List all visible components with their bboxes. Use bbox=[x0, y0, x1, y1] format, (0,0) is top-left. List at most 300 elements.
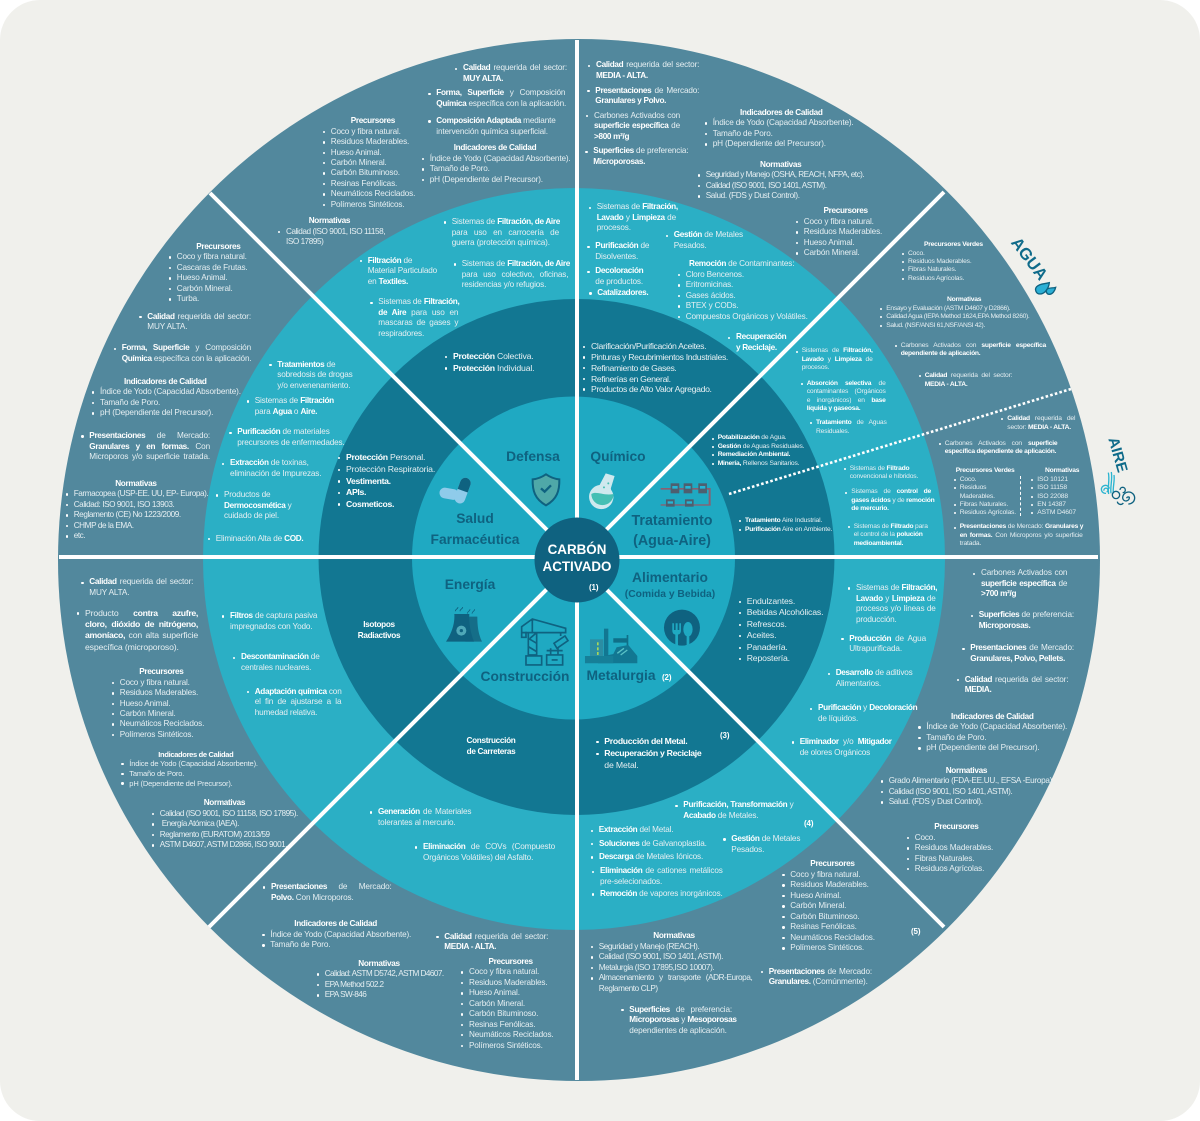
Salud: precursores: Precursores bbox=[196, 242, 240, 251]
sector title: Salud Farmacéutica: Salud bbox=[456, 511, 494, 526]
Salud: dermocosmética: Dermocosmética y bbox=[224, 501, 292, 510]
Agua: calidad bbox=[919, 372, 1012, 388]
Aire: normativas: ASTM D4607 bbox=[1037, 509, 1076, 516]
Metalurgia: normativas: Normativas bbox=[653, 931, 695, 940]
Energía: calidad: MUY ALTA. bbox=[89, 588, 129, 597]
Aire: normativas bbox=[1031, 467, 1080, 516]
Energía: adaptación: el fin de ajustarse a la bbox=[255, 697, 341, 706]
Químico: precursores: Precursores bbox=[823, 206, 868, 215]
Alimentario: indicadores: Índice de Yodo (Capacidad Absorbente). bbox=[926, 722, 1067, 731]
Salud: forma: Forma, Superficie y Composición bbox=[122, 343, 251, 352]
Construcción: precursores: Carbón Mineral. bbox=[469, 999, 525, 1008]
Agua: precursores verdes: Residuos Agrícolas. bbox=[908, 275, 964, 282]
Aire: carbones: específica dependiente de aplicación. bbox=[945, 448, 1056, 455]
Energía: producto: específica (microporoso). bbox=[85, 642, 179, 652]
Agua: precursores verdes: Precursores Verdes bbox=[924, 241, 983, 248]
Agua: normativas: Ensayo y Evaluación (ASTM D4607 y D2866). bbox=[886, 305, 1010, 312]
Salud: normativas: Farmacopea (USP-EE. UU, EP- Europa). bbox=[74, 489, 208, 498]
Alimentario: presentaciones: Granulares, Polvo, Pellets. bbox=[970, 654, 1065, 663]
Energía: precursores: Neumáticos Reciclados. bbox=[120, 719, 204, 728]
Construcción: presentaciones: Presentaciones de Mercado: bbox=[271, 882, 392, 891]
Salud: presentaciones bbox=[89, 431, 210, 463]
Energía: producto: Producto contra azufre, bbox=[85, 608, 198, 618]
Salud: dermocosmética: cuidado de piel. bbox=[224, 511, 279, 520]
Agua: filtración: Sistemas de Filtración, bbox=[802, 347, 873, 354]
Químico: calidad: Calidad requerida del sector: bbox=[596, 60, 699, 69]
Energía: normativas: ASTM D4607, ASTM D2866, ISO 9001. bbox=[160, 840, 287, 849]
Agua: normativas: Normativas bbox=[947, 296, 981, 303]
Defensa: precursores: Resinas Fenólicas. bbox=[331, 179, 397, 188]
Alimentario: normativas: Calidad (ISO 9001, ISO 1401, ASTM). bbox=[889, 787, 1012, 796]
Defensa: textiles: Filtración de bbox=[368, 256, 412, 265]
Construcción: COVs: Orgánicos Volátiles) del Asfalto. bbox=[423, 853, 533, 862]
Salud: presentaciones: Granulares y en formas. Con bbox=[89, 442, 210, 451]
Salud: purificación: precursores de enfermedades. bbox=[237, 438, 345, 447]
Aire: presentaciones: en formas. Con Microporos y/o superficie bbox=[960, 532, 1083, 539]
Defensa: calidad bbox=[455, 63, 567, 83]
Alimentario: aplicaciones: Panadería. bbox=[747, 642, 788, 652]
Defensa: filtración carrocería bbox=[444, 217, 560, 247]
Agua: calidad: MEDIA - ALTA. bbox=[925, 381, 968, 388]
Químico: indicadores bbox=[705, 108, 854, 148]
Químico: decoloración: Decoloración bbox=[595, 266, 643, 275]
Agua: carbones: Carbones Activados con superficie específica bbox=[901, 342, 1046, 349]
Químico: indicadores: Índice de Yodo (Capacidad Absorbente). bbox=[713, 118, 854, 127]
Energía: aplicación: Isotopos bbox=[363, 620, 395, 629]
Metalurgia: purificación: Acabado de Metales. bbox=[683, 811, 758, 820]
Defensa: precursores: Neumáticos Reciclados. bbox=[331, 189, 415, 198]
Químico: disolventes: Disolventes. bbox=[595, 252, 638, 261]
Químico: precursores: Coco y fibra natural. bbox=[804, 217, 874, 226]
Defensa: calidad: Calidad requerida del sector: bbox=[463, 63, 567, 72]
Energía: descontaminación: centrales nucleares. bbox=[241, 663, 311, 672]
Químico: carbones: >800 m²/g bbox=[594, 132, 629, 141]
Químico: disolventes: Purificación de bbox=[595, 241, 649, 250]
Alimentario: indicadores: pH (Dependiente del Precursor). bbox=[926, 743, 1040, 752]
second ring: processes bbox=[203, 188, 945, 930]
heading: Aire: AIRE bbox=[1104, 435, 1131, 474]
Aire: filtrado convencional bbox=[850, 465, 922, 482]
Metalurgia: cationes: pre-selecionados. bbox=[600, 877, 662, 886]
sector title: Químico: Químico bbox=[590, 449, 646, 464]
Energía: precursores: Coco y fibra natural. bbox=[120, 678, 190, 687]
Químico: contaminantes: BTEX y CODs. bbox=[686, 301, 738, 310]
Aire: gases ácidos: Sistemas de control de bbox=[851, 488, 931, 495]
Alimentario: aplicaciones: Endulzantes. bbox=[747, 596, 795, 606]
Alimentario: superficies bbox=[979, 610, 1074, 631]
Aire: precursores verdes: Maderables. bbox=[960, 493, 995, 500]
Químico: contaminantes: Compuestos Orgánicos y Volátiles. bbox=[686, 312, 808, 321]
Aire: precursores verdes: Precursores Verdes bbox=[956, 467, 1015, 474]
Defensa: indicadores bbox=[422, 143, 571, 184]
Metalurgia: aplicaciones: Producción del Metal. bbox=[604, 736, 687, 746]
Construcción: presentaciones: Polvo. Con Microporos. bbox=[271, 893, 354, 902]
Agua: absorción: e inorgánicos) en base bbox=[807, 397, 886, 404]
Energía: precursores: Hueso Animal. bbox=[120, 699, 171, 708]
Químico: superficies: Microporosas. bbox=[593, 157, 645, 166]
Metalurgia: superficies bbox=[629, 1005, 732, 1036]
Energía: producto bbox=[85, 608, 198, 653]
sector title: Tratamiento bbox=[631, 513, 713, 549]
Construcción: materiales: tolerantes al mercurio. bbox=[378, 818, 456, 827]
Energía: normativas: Energía Atómica (IAEA). bbox=[162, 819, 239, 828]
Químico: normativas: Calidad (ISO 9001, ISO 1401, ASTM). bbox=[706, 181, 827, 190]
Alimentario: olores bbox=[800, 737, 892, 758]
Salud: purificación: Purificación de materiales bbox=[237, 427, 330, 436]
Construcción: aplicación: de Carreteras bbox=[467, 747, 515, 756]
Salud: aplicaciones bbox=[346, 452, 434, 510]
Aire: calidad: Calidad requerida del bbox=[1007, 415, 1075, 422]
Alimentario: precursores bbox=[915, 822, 993, 874]
sector title: Salud Farmacéutica bbox=[431, 511, 520, 546]
Construcción: materiales bbox=[378, 807, 471, 828]
Agua: absorción bbox=[801, 380, 886, 412]
Energía: descontaminación: Descontaminación de bbox=[241, 652, 320, 661]
Aire: polución: Sistemas de Filtrado para bbox=[854, 523, 928, 530]
Químico: recuperación: Recuperación bbox=[736, 332, 786, 341]
Alimentario: normativas: Normativas bbox=[946, 766, 987, 775]
Construcción: precursores: Resinas Fenólicas. bbox=[469, 1020, 535, 1029]
Metalurgia: normativas: Seguridad y Manejo (REACH). bbox=[599, 942, 699, 951]
Salud: forma: Química específica con la aplicación. bbox=[122, 354, 252, 363]
Químico: presentaciones: Granulares y Polvo. bbox=[595, 96, 666, 105]
Salud: filtración bbox=[255, 396, 333, 417]
Defensa: forma: Química específica con la aplicación. bbox=[436, 99, 566, 108]
Químico: decoloración: de productos. bbox=[595, 277, 643, 286]
Aire: polución: medioambiental. bbox=[854, 540, 903, 547]
Agua: precursores verdes: Residuos Maderables. bbox=[908, 258, 972, 265]
Químico: aplicaciones bbox=[583, 341, 728, 394]
Aire: polución: el control de la polución bbox=[854, 531, 923, 538]
Energía: adaptación bbox=[255, 687, 341, 718]
Aire: precursores verdes: Fibras Naturales. bbox=[960, 501, 1008, 508]
Energía: normativas bbox=[160, 798, 298, 851]
Metalurgia: normativas: Reglamento CLP) bbox=[599, 984, 658, 993]
Aire: precursores verdes bbox=[954, 467, 1016, 516]
Construcción: indicadores: Indicadores de Calidad bbox=[294, 919, 377, 928]
Agua: precursores verdes: Coco. bbox=[908, 250, 925, 257]
Defensa: precursores: Hueso Animal. bbox=[331, 148, 382, 157]
center label bbox=[542, 542, 611, 574]
Aire: normativas: EN 14387 bbox=[1037, 501, 1066, 508]
Salud: aplicaciones: Cosmeticos. bbox=[346, 499, 394, 509]
Construcción: COVs: Eliminación de COVs (Compuesto bbox=[423, 842, 555, 851]
Construcción: COVs bbox=[423, 842, 555, 863]
Químico: presentaciones: Presentaciones de Mercado: bbox=[595, 86, 699, 95]
sector title: Tratamiento: Tratamiento bbox=[631, 513, 713, 529]
Metalurgia: precursores: Carbón Bituminoso. bbox=[790, 912, 860, 921]
Aire: gases ácidos bbox=[851, 488, 931, 514]
Energía: normativas: Calidad (ISO 9001, ISO 11158, ISO 17895). bbox=[160, 809, 298, 818]
Alimentario: presentaciones bbox=[970, 643, 1074, 664]
Metalurgia: superficies: Microporosas y Mesoporosas bbox=[629, 1015, 737, 1024]
Salud: presentaciones: Microporos y/o superficie tratada. bbox=[89, 452, 210, 461]
Construcción: calidad bbox=[444, 932, 548, 953]
Construcción: normativas: EPA SW-846 bbox=[325, 990, 366, 999]
Construcción: normativas: EPA Method 502.2 bbox=[325, 980, 384, 989]
Alimentario: purificación: de líquidos. bbox=[818, 714, 858, 723]
footnote 4: (4) bbox=[804, 819, 813, 828]
Salud: normativas: Normativas bbox=[115, 479, 157, 488]
Defensa: composición bbox=[428, 116, 556, 136]
Químico: contaminantes: Gases ácidos. bbox=[686, 291, 736, 300]
dashed column separator bbox=[1020, 476, 1021, 516]
Energía: precursores: Carbón Mineral. bbox=[120, 709, 176, 718]
Agua: carbones: dependiente de aplicación. bbox=[901, 350, 980, 357]
Defensa: filtración colectiva bbox=[454, 259, 570, 289]
Salud: COD: Eliminación Alta de COD. bbox=[216, 534, 303, 543]
third ring: applications bbox=[318, 299, 834, 815]
footnote 5: (5) bbox=[911, 927, 920, 936]
Defensa: precursores: Polímeros Sintéticos. bbox=[331, 200, 404, 209]
Metalurgia: metales pesados: Gestión de Metales bbox=[731, 834, 800, 843]
Energía: producto: cloro, dióxido de nitrógeno, bbox=[85, 619, 198, 629]
Salud: normativas: CHMP de la EMA. bbox=[74, 521, 134, 530]
Defensa: protección: Protección Individual. bbox=[453, 363, 534, 373]
Alimentario: superficies: Microporosas. bbox=[979, 621, 1030, 630]
Defensa: normativas: Normativas bbox=[309, 216, 350, 225]
Construcción: materiales: Generación de Materiales bbox=[378, 807, 471, 816]
Construcción: indicadores: Índice de Yodo (Capacidad Absorbente). bbox=[270, 930, 411, 939]
Metalurgia: vapores: Remoción de vapores inorgánicos. bbox=[600, 889, 723, 898]
Aire: aplicaciones bbox=[745, 517, 831, 534]
Alimentario: indicadores bbox=[926, 712, 1066, 754]
Químico: indicadores: pH (Dependiente del Precursor). bbox=[713, 139, 826, 148]
Alimentario: aplicaciones: Aceites. bbox=[747, 630, 776, 640]
Defensa: precursores bbox=[323, 116, 415, 209]
Construcción: indicadores: Tamaño de Poro. bbox=[270, 940, 330, 949]
Defensa: filtración colectiva: residencias y/o refugios. bbox=[462, 280, 546, 289]
Aire: precursores verdes: Coco. bbox=[960, 476, 976, 483]
Agua: absorción: Absorción selectiva de bbox=[807, 380, 886, 387]
icon: cutlery bbox=[664, 610, 700, 646]
Químico: superficies bbox=[585, 146, 688, 166]
Químico: carbones: Carbones Activados con bbox=[594, 111, 680, 120]
Alimentario: aplicaciones: Repostería. bbox=[747, 653, 790, 663]
Energía: aplicación bbox=[344, 619, 414, 641]
sector title: Tratamiento: (Agua-Aire) bbox=[633, 533, 711, 549]
Químico: contaminantes: Remoción de Contaminantes: bbox=[689, 259, 794, 268]
Alimentario: calidad bbox=[965, 675, 1068, 696]
Químico: superficies: Superficies de preferencia: bbox=[593, 146, 688, 155]
Energía: filtros bbox=[230, 611, 317, 632]
Metalurgia: cationes: Eliminación de cationes metálicos bbox=[600, 866, 723, 875]
Defensa: máscaras bbox=[370, 297, 460, 338]
heading: Agua: AGUA bbox=[1007, 234, 1051, 284]
Químico: recuperación: y Reciclaje. bbox=[736, 343, 777, 352]
Salud: calidad: Calidad requerida del sector: bbox=[147, 312, 251, 321]
Construcción: aplicación: Construcción bbox=[467, 736, 515, 745]
Salud: tratamientos: Tratamientos de bbox=[277, 360, 335, 369]
Construcción: precursores: Carbón Bituminoso. bbox=[469, 1009, 538, 1018]
Alimentario: agua bbox=[849, 634, 926, 655]
Metalurgia: precursores: Resinas Fenólicas. bbox=[790, 922, 857, 931]
Químico: precursores: Residuos Maderables. bbox=[804, 227, 882, 236]
Construcción: indicadores bbox=[270, 919, 410, 951]
Metalurgia: precursores: Precursores bbox=[810, 859, 855, 868]
Agua: aplicaciones: Minería, Rellenos Sanitarios. bbox=[718, 460, 799, 467]
Aire: carbones bbox=[939, 440, 1058, 455]
Metalurgia: descarga: Descarga de Metales Iónicos. bbox=[599, 852, 703, 861]
Metalurgia: precursores: Coco y fibra natural. bbox=[790, 870, 860, 879]
Alimentario: olores: Eliminador y/o Mitigador bbox=[800, 737, 892, 746]
Agua: calidad: Calidad requerida del sector: bbox=[925, 372, 1012, 379]
Aire: filtrado convencional: Sistemas de Filtrado bbox=[850, 465, 909, 472]
Salud: precursores: Carbón Mineral. bbox=[177, 284, 233, 293]
Químico: metales pesados: Gestión de Metales bbox=[674, 230, 743, 239]
Energía: normativas: Normativas bbox=[204, 798, 245, 807]
Aire: normativas: ISO 10121 bbox=[1037, 476, 1068, 483]
Defensa: protección: Protección Colectiva. bbox=[453, 351, 534, 361]
Metalurgia: aplicaciones bbox=[604, 736, 704, 771]
Metalurgia: purificación bbox=[683, 800, 794, 821]
Aire: filtrado convencional: convencional e híbridos. bbox=[850, 473, 918, 480]
Metalurgia: aplicaciones: Recuperación y Reciclaje bbox=[604, 748, 701, 758]
Químico: precursores bbox=[796, 206, 882, 257]
icon: nuclear plant bbox=[446, 607, 482, 642]
Salud: indicadores: pH (Dependiente del Precursor). bbox=[100, 408, 213, 417]
Químico: aplicaciones: Pinturas y Recubrimientos Industriales. bbox=[591, 352, 728, 362]
Químico: presentaciones bbox=[587, 86, 699, 105]
Agua: filtración bbox=[796, 347, 873, 371]
Defensa: composición: intervención química superficial. bbox=[436, 127, 548, 136]
Alimentario: normativas: Grado Alimentario (FDA-EE.UU., EFSA -Europa). bbox=[889, 776, 1054, 785]
Salud: precursores: Cascaras de Frutas. bbox=[177, 263, 248, 272]
footnote 2: (2) bbox=[662, 673, 671, 682]
Agua: carbones bbox=[895, 342, 1046, 357]
Defensa: forma bbox=[428, 88, 566, 108]
Construcción: normativas: Calidad: ASTM D5742, ASTM D4607. bbox=[325, 969, 444, 978]
central circle bbox=[534, 518, 620, 602]
Aire: calidad: sector: MEDIA - ALTA. bbox=[1007, 424, 1071, 431]
sector title: Metalurgia: Metalurgia bbox=[586, 668, 656, 683]
icon: metallurgy plant bbox=[585, 629, 637, 663]
Aire: normativas: ISO 11158 bbox=[1037, 484, 1067, 491]
Defensa: filtración carrocería: Sistemas de Filtración, de Aire bbox=[452, 217, 560, 226]
Químico: aplicaciones: Refinerías en General. bbox=[591, 374, 671, 384]
Alimentario: purificación bbox=[818, 703, 916, 724]
Defensa: normativas bbox=[278, 216, 385, 246]
Alimentario: filtración: procesos y/o líneas de bbox=[856, 604, 936, 613]
Químico: disolventes bbox=[587, 241, 650, 261]
icon: flask bbox=[590, 474, 614, 509]
Salud: aplicaciones: Vestimenta. bbox=[346, 476, 391, 486]
sector title: Energía: Energía bbox=[445, 577, 495, 592]
Energía: adaptación: humedad relativa. bbox=[255, 708, 317, 717]
Salud: dermocosmética bbox=[224, 490, 290, 522]
Metalurgia: normativas: Metalurgia (ISO 17895,ISO 10007). bbox=[599, 963, 714, 972]
Energía: adaptación: Adaptación química con bbox=[255, 687, 342, 696]
Metalurgia: normativas bbox=[599, 931, 752, 994]
Energía: normativas: Reglamento (EURATOM) 2013/59 bbox=[160, 830, 270, 839]
Agua: absorción: contaminantes (Orgánicos bbox=[807, 388, 886, 395]
Alimentario: aditivos: Alimentarios. bbox=[836, 679, 881, 688]
Salud: toxinas bbox=[230, 458, 322, 479]
Defensa: textiles: en Textiles. bbox=[368, 277, 408, 286]
Salud: indicadores: Tamaño de Poro. bbox=[100, 398, 160, 407]
Químico: metales pesados bbox=[666, 230, 743, 250]
Defensa: protección bbox=[445, 351, 534, 373]
Aire: gases ácidos: de mercurio. bbox=[851, 505, 889, 512]
Metalurgia: precursores: Polímeros Sintéticos. bbox=[790, 943, 864, 952]
Químico: precursores: Carbón Mineral. bbox=[804, 248, 860, 257]
Agua: absorción: líquida y gaseosa. bbox=[807, 405, 860, 412]
Metalurgia: precursores: Hueso Animal. bbox=[790, 891, 841, 900]
Agua: normativas: Salud. (NSF/ANSI 61,NSF/ANSI 42). bbox=[886, 322, 985, 329]
Defensa: precursores: Residuos Maderables. bbox=[331, 137, 409, 146]
Construcción: aplicación bbox=[446, 735, 536, 757]
Agua: aguas residuales: Residuales. bbox=[816, 428, 849, 435]
Construcción: normativas bbox=[325, 959, 443, 1001]
Químico: calidad: MEDIA - ALTA. bbox=[596, 71, 648, 80]
Alimentario: normativas bbox=[889, 766, 1049, 808]
Alimentario: agua: Ultrapurificada. bbox=[849, 644, 902, 653]
Químico: normativas bbox=[698, 160, 864, 200]
Metalurgia: purificación: Purificación, Transformación y bbox=[683, 800, 794, 809]
Químico: indicadores: Indicadores de Calidad bbox=[740, 108, 823, 117]
Energía: indicadores: Indicadores de Calidad bbox=[158, 750, 233, 759]
Construcción: calidad: MEDIA - ALTA. bbox=[444, 942, 496, 951]
Construcción: normativas: Normativas bbox=[358, 959, 400, 968]
Químico: aplicaciones: Clarificación/Purificación Aceites. bbox=[591, 341, 706, 351]
Salud: indicadores: Indicadores de Calidad bbox=[124, 377, 207, 386]
sector subtitle: Comida y Bebida: (Comida y Bebida) bbox=[625, 589, 715, 600]
Defensa: textiles bbox=[360, 256, 437, 286]
Construcción: precursores: Polímeros Sintéticos. bbox=[469, 1041, 543, 1050]
Alimentario: purificación: Purificación y Decoloración bbox=[818, 703, 917, 712]
Defensa: filtración colectiva: Sistemas de Filtración, de Aire bbox=[462, 259, 570, 268]
Agua: aplicaciones bbox=[718, 434, 804, 468]
icon: treatment plant bbox=[661, 483, 711, 507]
Aire: aplicaciones: Purificación Aire en Ambiente. bbox=[745, 526, 832, 533]
Químico: calidad bbox=[588, 60, 699, 80]
Alimentario: precursores: Coco. bbox=[915, 833, 935, 842]
Energía: aplicación: Radiactivos bbox=[358, 631, 400, 640]
Salud: indicadores bbox=[100, 377, 240, 419]
Aire: gases ácidos: gases ácidos y de remoción bbox=[851, 497, 934, 504]
Alimentario: agua: Producción de Agua bbox=[849, 634, 926, 643]
Aire: presentaciones bbox=[954, 523, 1084, 547]
footnote 1: (1) bbox=[589, 583, 598, 592]
Aire: polución bbox=[854, 523, 927, 548]
icon: pills bbox=[439, 476, 472, 505]
Metalurgia: presentaciones: Presentaciones de Mercado: bbox=[769, 967, 872, 976]
Salud: precursores: Turba. bbox=[177, 294, 199, 303]
Alimentario: carbones: >700 m²/g bbox=[981, 589, 1016, 598]
Energía: calidad: Calidad requerida del sector: bbox=[89, 577, 193, 586]
Metalurgia: soluciones: Soluciones de Galvanoplastia. bbox=[599, 839, 707, 848]
Alimentario: indicadores: Tamaño de Poro. bbox=[926, 733, 986, 742]
Alimentario: precursores: Precursores bbox=[934, 822, 978, 831]
Metalurgia: precursores bbox=[790, 859, 874, 954]
Construcción: precursores: Coco y fibra natural. bbox=[469, 967, 539, 976]
Construcción: precursores: Residuos Maderables. bbox=[469, 978, 547, 987]
Salud: normativas: Calidad: ISO 9001, ISO 13903. bbox=[74, 500, 174, 509]
Aire: normativas: ISO 22088 bbox=[1037, 493, 1068, 500]
Alimentario: precursores: Residuos Maderables. bbox=[915, 843, 993, 852]
Salud: aplicaciones: APIs. bbox=[346, 487, 366, 497]
Salud: precursores: Hueso Animal. bbox=[177, 273, 228, 282]
Energía: precursores: Polímeros Sintéticos. bbox=[120, 730, 193, 739]
Energía: indicadores bbox=[129, 750, 257, 788]
Energía: indicadores: pH (Dependiente del Precursor). bbox=[129, 779, 233, 788]
Defensa: indicadores: Tamaño de Poro. bbox=[430, 164, 490, 173]
Alimentario: carbones bbox=[981, 568, 1067, 600]
Salud: tratamientos: sobredosis de drogas bbox=[277, 370, 353, 379]
Salud: toxinas: Extracción de toxinas, bbox=[230, 458, 309, 467]
Metalurgia: extracción: Extracción del Metal. bbox=[599, 825, 673, 834]
Metalurgia: superficies: dependientes de aplicación. bbox=[629, 1026, 727, 1035]
